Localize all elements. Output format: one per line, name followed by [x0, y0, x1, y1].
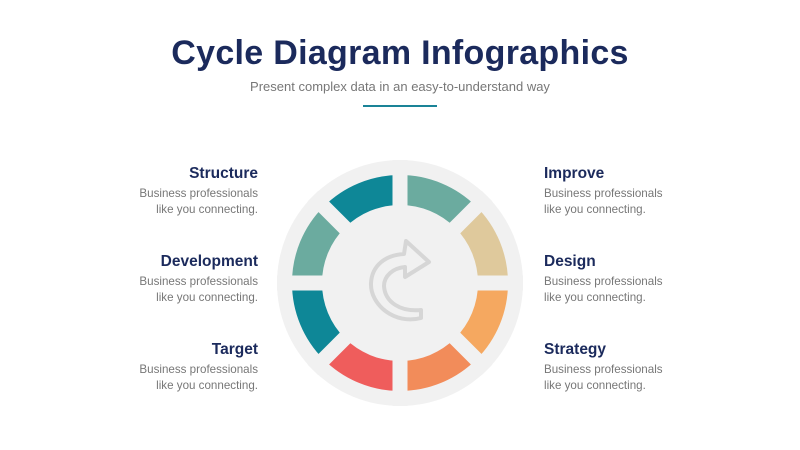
right: Design: [544, 253, 663, 304]
right: Strategy: [544, 341, 663, 392]
left: Structure: [139, 165, 258, 216]
left: Development: Business professionals: [139, 275, 258, 288]
accent line: [363, 105, 437, 107]
right: Design: like you connecting.: [544, 291, 646, 304]
left: Target: like you connecting.: [156, 379, 258, 392]
icon: curved arrow: [371, 241, 429, 319]
right: Strategy: Strategy: [544, 341, 606, 358]
left: Development: Development: [161, 253, 258, 270]
right: Design: Design: [544, 253, 596, 270]
right: Improve: Improve: [544, 165, 604, 182]
right: Improve: [544, 165, 663, 216]
subtitle: Present complex data in an easy-to-understand way: [250, 79, 550, 94]
right: Improve: Business professionals: [544, 187, 663, 200]
left: Development: like you connecting.: [156, 291, 258, 304]
left: Structure: Structure: [189, 165, 258, 182]
left: Target: [139, 341, 258, 392]
left: Structure: Business professionals: [139, 187, 258, 200]
left: Target: Business professionals: [139, 363, 258, 376]
left: Structure: like you connecting.: [156, 203, 258, 216]
right: Design: Business professionals: [544, 275, 663, 288]
right: Strategy: Business professionals: [544, 363, 663, 376]
left: Target: Target: [212, 341, 258, 358]
right: Strategy: like you connecting.: [544, 379, 646, 392]
right: Improve: like you connecting.: [544, 203, 646, 216]
title: Cycle Diagram Infographics: [171, 34, 629, 72]
left: Development: [139, 253, 258, 304]
